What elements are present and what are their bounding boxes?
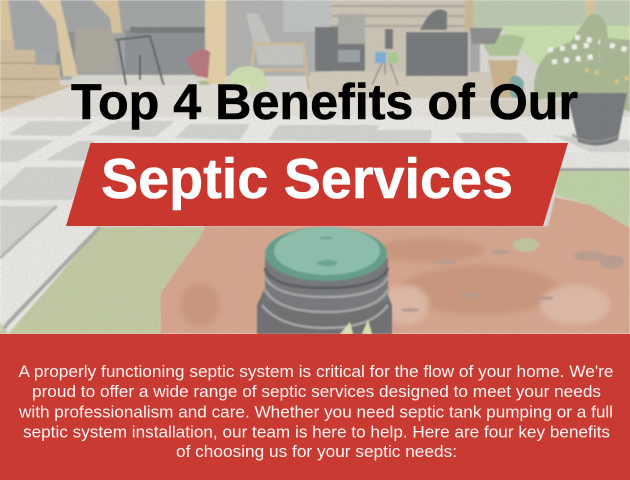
cups [375, 52, 386, 63]
title: Top 4 Benefits of Our: Top 4 Benefits of Our [71, 74, 578, 130]
posts [38, 0, 78, 76]
septic riser [257, 227, 392, 334]
basket [488, 60, 518, 98]
soil [160, 197, 630, 334]
banner: Septic Services [66, 143, 568, 226]
patio shade area [0, 0, 480, 80]
dark chairs [315, 9, 468, 76]
intro text: septic system installation, our team is here to help. Here are four key benefits [23, 422, 610, 442]
black chair, left [115, 36, 165, 90]
gravel with stepping stones [0, 117, 630, 172]
intro text: proud to offer a wide range of septic services designed to meet your needs [32, 382, 601, 401]
planter [480, 152, 630, 168]
intro text [18, 362, 613, 461]
intro text: of choosing us for your septic needs: [176, 442, 457, 461]
stairs [0, 40, 75, 112]
background photo: backyard patio and septic riser [0, 0, 630, 334]
texture grain [0, 0, 630, 334]
patio slab [75, 98, 575, 118]
grass left [0, 227, 539, 334]
chair left [246, 13, 303, 65]
intro text: with professionalism and care. Whether you need septic tank pumping or a full [18, 402, 613, 422]
intro panel [0, 334, 630, 480]
banner: Septic Services: Septic Services [101, 147, 513, 211]
intro text: A properly functioning septic system is critical for the flow of your home. We're [18, 362, 614, 381]
plants [186, 49, 210, 78]
grass right [555, 170, 630, 228]
fridge/grill [283, 0, 331, 32]
lawn [470, 0, 630, 28]
